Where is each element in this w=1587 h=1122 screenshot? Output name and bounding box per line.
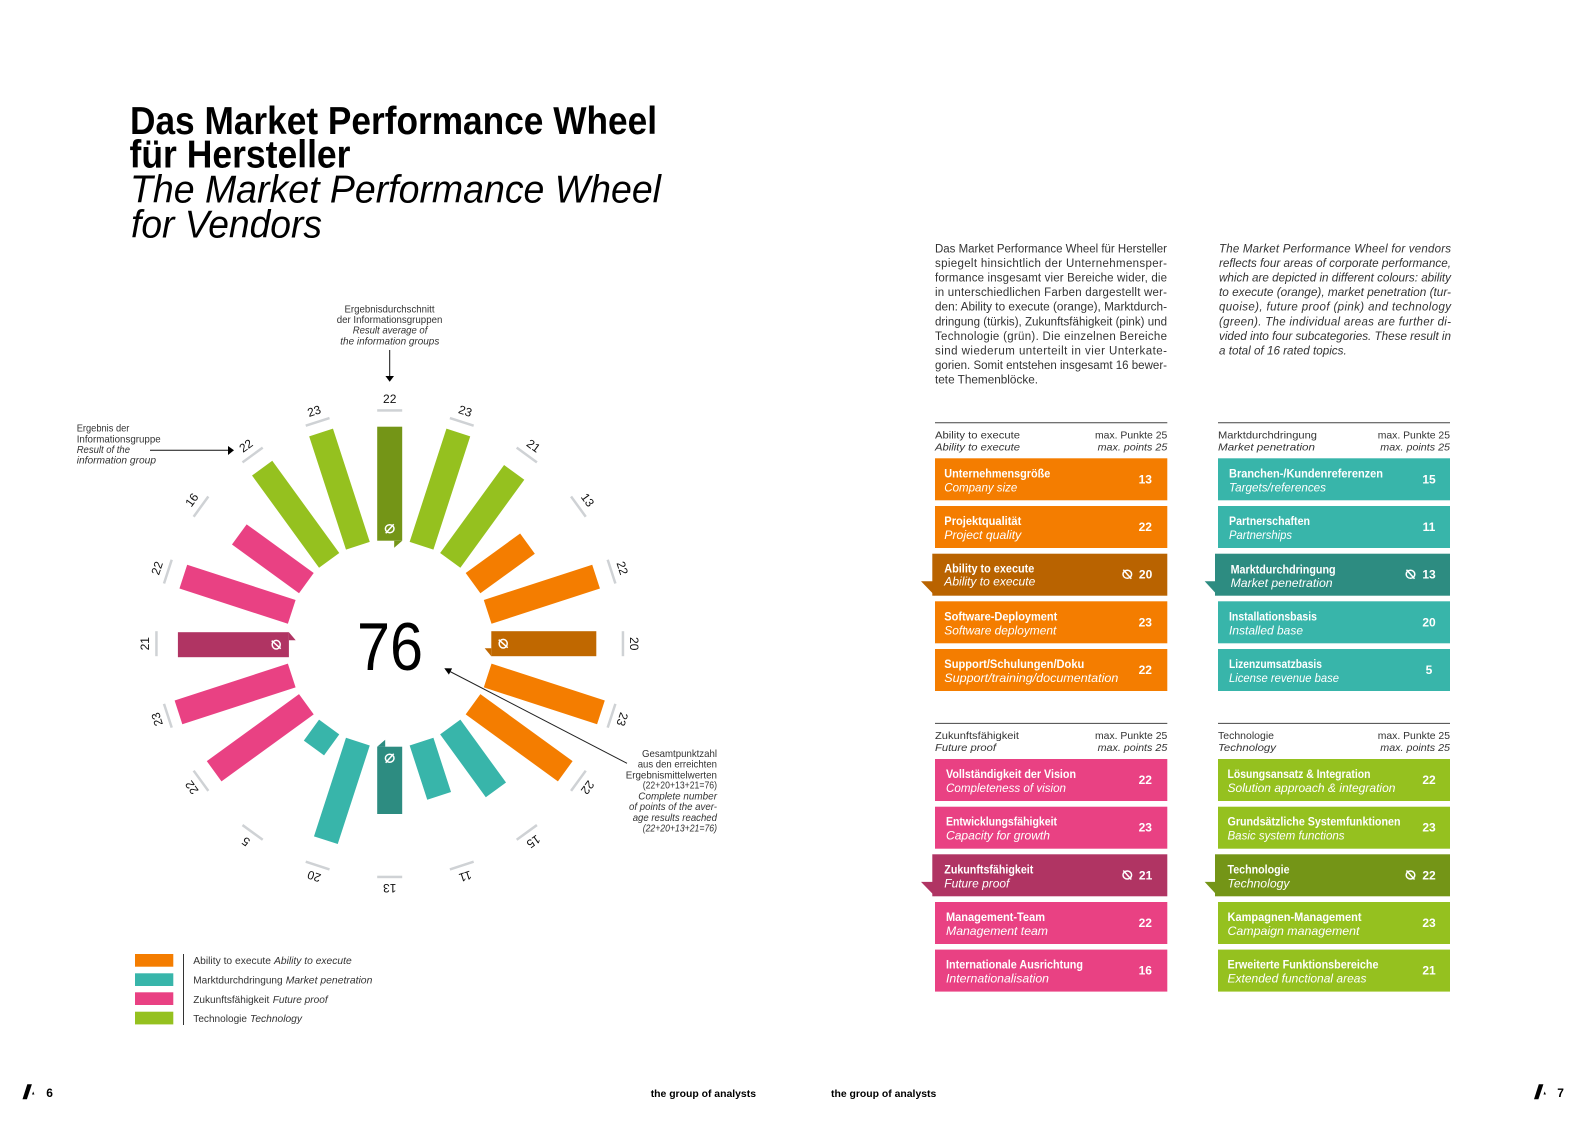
chart: market performance wheel: [138, 392, 641, 895]
annotation: result of the information group: Result of the: [77, 444, 130, 456]
annotation: result average: Ergebnisdurchschnitt: [344, 303, 435, 315]
panel: Technologie: max. Punkte 25: [1378, 730, 1450, 742]
row: Projektqualität: Projektqualität: [944, 514, 1021, 528]
row: Projektqualität: Project quality: [944, 528, 1022, 542]
arrow: total number of points: [444, 668, 627, 763]
row: Zukunftsfähigkeit average: Zukunftsfähigkeit: [944, 863, 1033, 877]
row: Zukunftsfähigkeit average: Future proof: [944, 876, 1011, 890]
row: Erweiterte Funktionsbereiche: Erweiterte Funktionsbereiche: [1228, 958, 1379, 972]
row: Management-Team: [935, 902, 1167, 944]
text block: German intro: sind wiederum unterteilt in vier Unterkate-: [935, 346, 1167, 358]
row: Branchen-/Kundenreferenzen: [1218, 458, 1450, 500]
panel: Ability to execute: max. points 25: [1098, 441, 1167, 453]
row: Lösungsansatz & Integration: Lösungsansatz & Integration: [1228, 767, 1370, 781]
title: The Market Performance Wheel: [130, 168, 662, 212]
row: Erweiterte Funktionsbereiche: Extended functional areas: [1228, 972, 1366, 986]
panel: Marktdurchdringung: max. Punkte 25: [1378, 429, 1450, 441]
legend: Ability to execute: [273, 955, 352, 967]
row: Entwicklungsfähigkeit: 23: [1139, 821, 1152, 835]
panel: Zukunftsfähigkeit: Zukunftsfähigkeit: [935, 730, 1019, 742]
annotation: result average: [337, 303, 443, 347]
spoke: Vollständigkeit der Vision 22: [179, 694, 314, 802]
row: Installationsbasis: Installed base: [1229, 623, 1303, 637]
annotation: total number of points: Gesamtpunktzahl: [642, 748, 717, 760]
spoke: Installationsbasis 20: [300, 738, 370, 887]
spoke: Ability to execute average 20: 20: [627, 637, 641, 651]
text block: English intro: [1219, 243, 1452, 358]
total score: 76: [357, 609, 423, 685]
text block: German intro: [935, 243, 1167, 387]
row: Internationale Ausrichtung: Internationale Ausrichtung: [946, 958, 1083, 972]
row: Zukunftsfähigkeit average: 21: [1139, 868, 1153, 882]
text block: English intro: The Market Performance Wheel for vendors: [1219, 243, 1451, 255]
arrow: result average: [385, 350, 394, 382]
row: Internationale Ausrichtung: Internationalisation: [946, 972, 1049, 986]
spoke: Support/Schulungen/Doku 22: [466, 694, 601, 802]
annotation: total number of points: (22+20+13+21=76): [643, 822, 717, 834]
text block: English intro: to execute (orange), market penetration (tur-: [1219, 287, 1451, 299]
row: Installationsbasis: 20: [1422, 615, 1436, 629]
panel: Marktdurchdringung: max. points 25: [1380, 441, 1450, 453]
row: Installationsbasis: [1218, 601, 1450, 643]
spoke: Internationale Ausrichtung 16: 16: [182, 490, 202, 510]
annotation: total number of points: of points of the aver-: [629, 801, 717, 813]
row: Lizenzumsatzbasis: [1218, 649, 1450, 691]
spoke: Lösungsansatz 22: 22: [236, 436, 256, 455]
row: Internationale Ausrichtung: 16: [1139, 964, 1152, 978]
spoke: Technologie average 22: 22: [383, 392, 397, 406]
footer right: logo and page number: [1534, 1084, 1564, 1100]
spoke: Entwicklungsfähigkeit 23: 23: [148, 710, 166, 728]
spoke: Unternehmensgröße 13: 13: [578, 490, 597, 510]
row: Grundsätzliche Systemfunktionen: Basic system functions: [1228, 829, 1344, 843]
row: Support/Schulungen/Doku: Support/training/documentation: [944, 671, 1119, 685]
spoke: Grundsätzliche Systemfunktionen 23: 23: [457, 402, 474, 420]
text block: German intro: tete Themenblöcke.: [935, 375, 1038, 387]
row: Zukunftsfähigkeit average: [921, 854, 1167, 896]
row: Grundsätzliche Systemfunktionen: Grundsätzliche Systemfunktionen: [1228, 815, 1400, 829]
spoke: Lizenzumsatzbasis 5: 5: [239, 834, 253, 849]
row: Ability to execute average: 20: [1139, 568, 1153, 582]
spoke: Installationsbasis 20: 20: [305, 867, 323, 885]
panel: Technologie: max. points 25: [1380, 742, 1450, 754]
spoke: Marktdurchdringung average 13: [377, 740, 402, 895]
panel: Ability to execute: Ability to execute: [934, 441, 1020, 453]
annotation: total number of points: [626, 748, 718, 834]
row: Erweiterte Funktionsbereiche: [1218, 950, 1450, 992]
spoke: Management-Team 22: [147, 554, 296, 624]
annotation: total number of points: (22+20+13+21=76): [643, 780, 717, 792]
row: Vollständigkeit der Vision: Vollständigkeit der Vision: [946, 767, 1076, 781]
panel: Zukunftsfähigkeit: max. points 25: [1098, 742, 1167, 754]
annotation: result average: Result average of: [353, 324, 428, 336]
spoke: Lizenzumsatzbasis 5: [232, 720, 339, 855]
legend: Future proof: [273, 994, 329, 1006]
spoke: Branchen-/Kundenreferenzen 15: [440, 720, 548, 855]
row: Kampagnen-Management: Kampagnen-Management: [1228, 910, 1362, 924]
annotation: result average: the information groups: [340, 335, 440, 347]
spoke: Internationale Ausrichtung 16: [179, 486, 314, 593]
spoke: Marktdurchdringung average 13: 13: [383, 881, 396, 895]
spoke: Erweiterte Funktionsbereiche 21: [440, 433, 548, 568]
spoke: Kampagnen-Management 23: 23: [306, 402, 323, 420]
annotation: result of the information group: Ergebnis der: [77, 423, 130, 435]
row: Unternehmensgröße: Unternehmensgröße: [944, 466, 1051, 480]
spoke: Zukunftsfähigkeit average 21: [138, 631, 296, 657]
row: Erweiterte Funktionsbereiche: 21: [1422, 964, 1436, 978]
text block: English intro: a total of 16 rated topics.: [1219, 346, 1347, 358]
title: [130, 100, 662, 246]
panel: Ability to execute: Ability to execute: [935, 429, 1020, 441]
spoke: Entwicklungsfähigkeit 23: [147, 664, 296, 733]
row: Software-Deployment: 23: [1139, 615, 1152, 629]
text block: German intro: in unterschiedlichen Farben dargestellt wer-: [935, 287, 1167, 299]
spoke: Grundsätzliche Systemfunktionen 23: [410, 401, 479, 550]
row: Entwicklungsfähigkeit: Capacity for growth: [946, 829, 1050, 843]
spoke: Vollständigkeit der Vision 22: 22: [182, 778, 201, 797]
panel: Ability to execute: [921, 423, 1167, 691]
panel: Marktdurchdringung: [1205, 423, 1450, 691]
title: für Hersteller: [130, 134, 350, 176]
row: Lösungsansatz & Integration: Solution approach & integration: [1228, 781, 1396, 795]
row: Grundsätzliche Systemfunktionen: [1218, 807, 1450, 849]
row: Management-Team: Management team: [946, 924, 1048, 938]
panel: Zukunftsfähigkeit: [921, 723, 1167, 992]
row: Marktdurchdringung average: Market penetration: [1231, 576, 1333, 590]
footer left: logo and page number: 6: [46, 1086, 53, 1100]
row: Branchen-/Kundenreferenzen: Branchen-/Kundenreferenzen: [1229, 466, 1383, 480]
row: Support/Schulungen/Doku: [935, 649, 1167, 691]
row: Vollständigkeit der Vision: [935, 759, 1167, 801]
row: Support/Schulungen/Doku: Support/Schulungen/Doku: [944, 657, 1084, 671]
text block: English intro: which are depicted in different colours: ability: [1219, 272, 1452, 284]
legend: [135, 954, 373, 1025]
annotation: total number of points: age results reached: [633, 812, 718, 824]
row: Lizenzumsatzbasis: 5: [1426, 663, 1433, 677]
row: Marktdurchdringung average: 13: [1422, 568, 1436, 582]
text block: German intro: Technologie (grün). Die einzelnen Bereiche: [935, 331, 1167, 343]
panel: Marktdurchdringung: Marktdurchdringung: [1218, 429, 1317, 441]
row: Support/Schulungen/Doku: 22: [1139, 663, 1152, 677]
legend: Technology: [250, 1013, 303, 1025]
row: Ability to execute average: [921, 554, 1167, 596]
spoke: Kampagnen-Management 23: [300, 401, 370, 550]
row: Entwicklungsfähigkeit: [935, 807, 1167, 849]
spoke: Zukunftsfähigkeit average 21: 21: [138, 637, 152, 650]
legend: Zukunftsfähigkeit: [193, 994, 269, 1006]
spoke: Partnerschaften 11: 11: [457, 868, 473, 885]
spoke: Branchen-/Kundenreferenzen 15: 15: [524, 832, 543, 851]
row: Kampagnen-Management: 23: [1422, 916, 1436, 930]
row: Ability to execute average: Ability to execute: [943, 574, 1036, 588]
row: Ability to execute average: Ability to execute: [944, 561, 1035, 575]
row: Partnerschaften: [1218, 506, 1450, 548]
legend: Technologie: [193, 1013, 247, 1025]
row: Lizenzumsatzbasis: License revenue base: [1229, 671, 1339, 685]
row: Partnerschaften: Partnerships: [1229, 528, 1292, 542]
row: Unternehmensgröße: [935, 458, 1167, 500]
spoke: Projektqualität 22: 22: [614, 560, 631, 577]
footer left: publisher: the group of analysts: [651, 1088, 756, 1100]
row: Technologie average: [1205, 854, 1450, 896]
row: Marktdurchdringung average: Marktdurchdringung: [1231, 562, 1336, 576]
legend: Market penetration: [286, 974, 373, 986]
text block: English intro: reflects four areas of corporate performance,: [1219, 258, 1451, 270]
panel: Technologie: [1205, 723, 1450, 992]
panel: Zukunftsfähigkeit: max. Punkte 25: [1095, 730, 1167, 742]
annotation: total number of points: Ergebnismittelwerten: [626, 769, 717, 781]
spoke: Unternehmensgröße 13: [466, 486, 601, 593]
row: Lösungsansatz & Integration: [1218, 759, 1450, 801]
annotation: result of the information group: [77, 423, 161, 467]
panel: Technologie: Technologie: [1218, 730, 1274, 742]
text block: German intro: spiegelt hinsichtlich der Unternehmensper-: [935, 258, 1167, 270]
row: Entwicklungsfähigkeit: Entwicklungsfähigkeit: [946, 815, 1057, 829]
spoke: Partnerschaften 11: [410, 738, 479, 887]
row: Internationale Ausrichtung: [935, 950, 1167, 992]
text block: German intro: dringung (türkis), Zukunftsfähigkeit (pink) und: [935, 316, 1167, 328]
row: Lizenzumsatzbasis: Lizenzumsatzbasis: [1229, 657, 1322, 671]
panel: Ability to execute: max. Punkte 25: [1095, 429, 1167, 441]
annotation: result of the information group: Informationsgruppe: [77, 434, 161, 446]
annotation: total number of points: aus den erreichten: [638, 758, 717, 770]
spoke: Projektqualität 22: [484, 554, 633, 624]
panel: Zukunftsfähigkeit: Future proof: [935, 742, 997, 754]
row: Software-Deployment: [935, 601, 1167, 643]
annotation: result average: der Informationsgruppen: [337, 314, 443, 326]
row: Projektqualität: 22: [1139, 520, 1152, 534]
annotation: total number of points: Complete number: [638, 790, 717, 802]
spoke: Software-Deployment 23: [484, 664, 633, 733]
row: Marktdurchdringung average: [1205, 554, 1450, 596]
text block: English intro: vided into four subcategories. These result in: [1219, 331, 1451, 343]
legend: Ability to execute: [193, 955, 271, 967]
arrow: result of the information group: [150, 446, 234, 455]
panel: Marktdurchdringung: Market penetration: [1218, 441, 1315, 453]
row: Management-Team: 22: [1139, 916, 1152, 930]
text block: English intro: quoise), future proof (pink) and technology: [1219, 302, 1452, 314]
row: Branchen-/Kundenreferenzen: 15: [1422, 472, 1436, 486]
row: Kampagnen-Management: [1218, 902, 1450, 944]
row: Unternehmensgröße: Company size: [944, 480, 1018, 494]
row: Technologie average: Technology: [1228, 876, 1291, 890]
panel: Technologie: Technology: [1218, 742, 1277, 754]
row: Unternehmensgröße: 13: [1139, 472, 1152, 486]
spoke: Ability to execute average 20: [485, 631, 641, 656]
row: Branchen-/Kundenreferenzen: Targets/references: [1229, 480, 1326, 494]
row: Software-Deployment: Software-Deployment: [944, 609, 1057, 623]
text block: German intro: formance insgesamt vier Bereiche wider, die: [935, 272, 1167, 284]
row: Vollständigkeit der Vision: 22: [1139, 773, 1152, 787]
spoke: Technologie average 22: [377, 392, 402, 548]
legend: Marktdurchdringung: [193, 974, 283, 986]
spoke: Lösungsansatz 22: [232, 433, 339, 568]
row: Lösungsansatz & Integration: 22: [1422, 773, 1436, 787]
row: Partnerschaften: Partnerschaften: [1229, 514, 1310, 528]
row: Vollständigkeit der Vision: Completeness of vision: [946, 781, 1066, 795]
row: Management-Team: Management-Team: [946, 910, 1045, 924]
text block: German intro: Das Market Performance Wheel für Hersteller: [935, 243, 1167, 255]
row: Partnerschaften: 11: [1423, 520, 1436, 534]
row: Technologie average: 22: [1422, 868, 1436, 882]
text block: German intro: gorien. Somit entstehen insgesamt 16 bewer-: [935, 360, 1167, 372]
footer right: publisher: the group of analysts: [831, 1088, 936, 1100]
spoke: Support/Schulungen/Doku 22: 22: [578, 778, 597, 797]
annotation: result of the information group: information group: [77, 455, 156, 467]
spoke: Software-Deployment 23: 23: [613, 711, 631, 728]
footer right: logo and page number: 7: [1557, 1086, 1564, 1100]
row: Projektqualität: [935, 506, 1167, 548]
row: Software-Deployment: Software deployment: [944, 623, 1057, 637]
footer left: logo and page number: [22, 1084, 53, 1100]
text block: German intro: den: Ability to execute (orange), Marktdurch-: [935, 302, 1167, 314]
title: Das Market Performance Wheel: [130, 100, 657, 143]
title: for Vendors: [131, 204, 322, 246]
spoke: Management-Team 22: 22: [148, 559, 166, 577]
row: Grundsätzliche Systemfunktionen: 23: [1422, 821, 1436, 835]
spoke: Erweiterte Funktionsbereiche 21: 21: [524, 436, 543, 456]
row: Technologie average: Technologie: [1228, 863, 1290, 877]
row: Kampagnen-Management: Campaign management: [1228, 924, 1360, 938]
text block: English intro: (green). The individual areas are further di-: [1219, 316, 1451, 328]
row: Installationsbasis: Installationsbasis: [1229, 609, 1317, 623]
